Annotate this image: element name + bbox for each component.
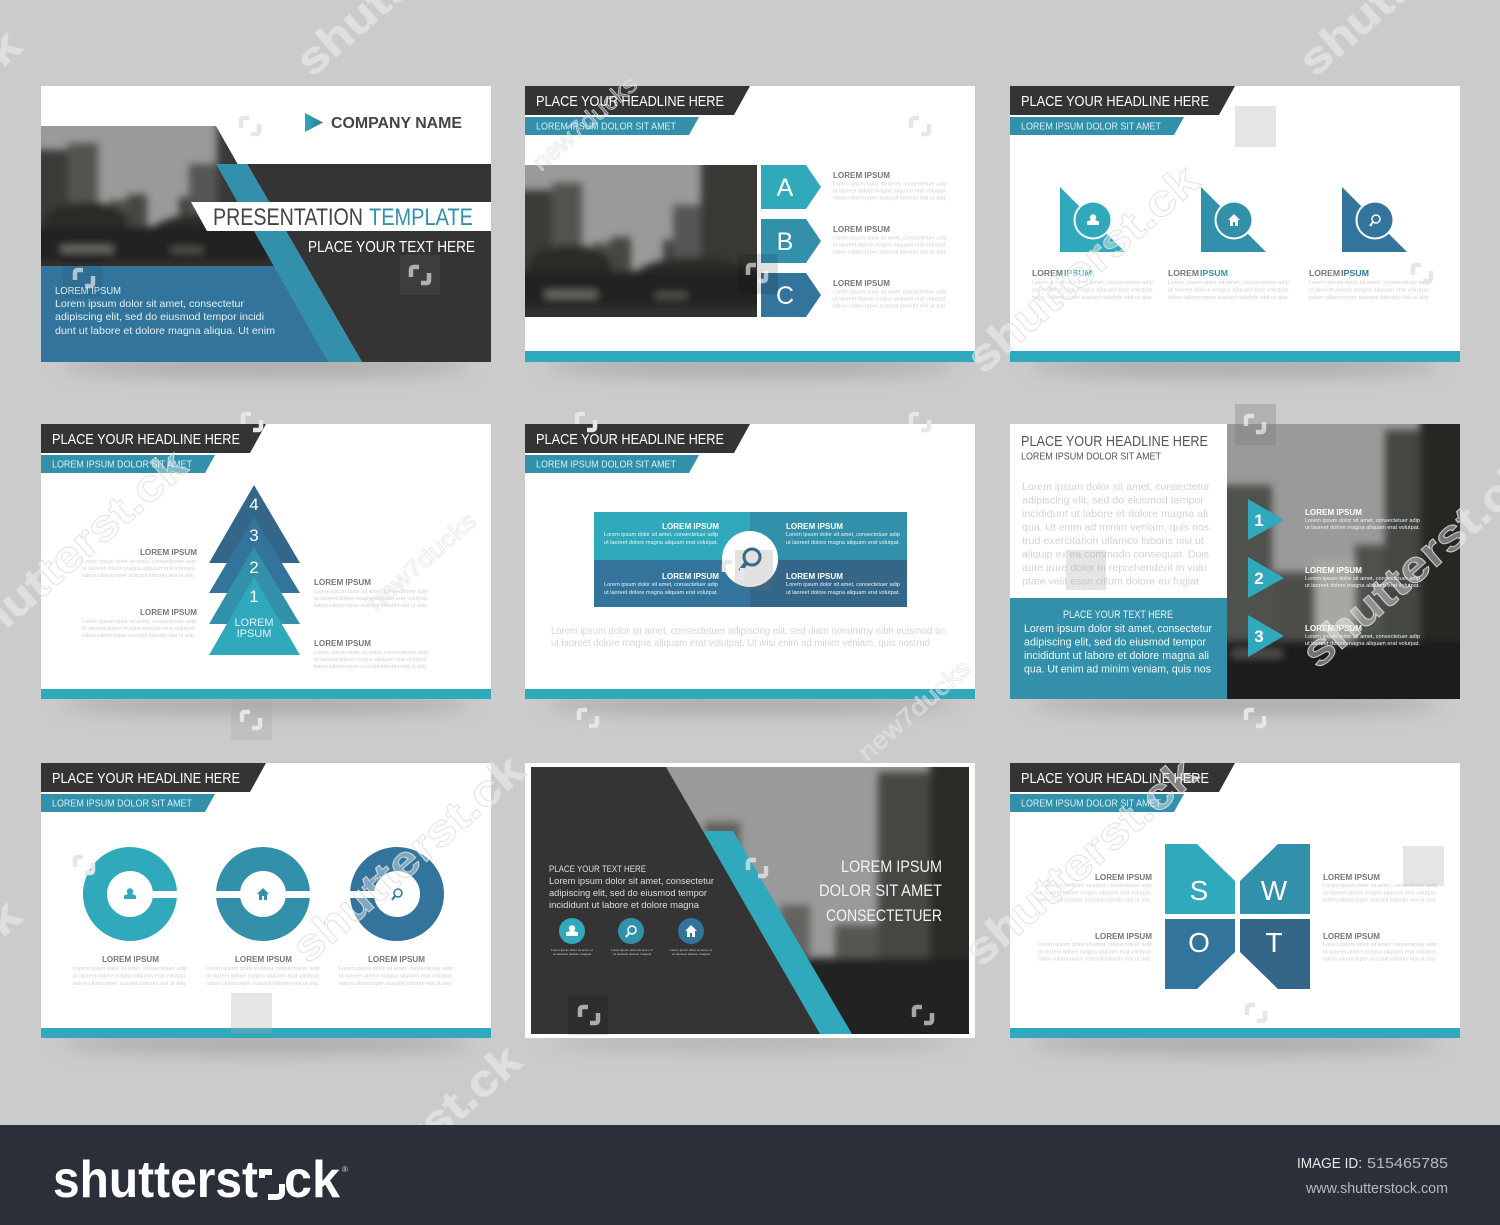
- text block S: [1038, 873, 1152, 904]
- image id: www.shutterstock.com: [1305, 1181, 1448, 1197]
- headline: LOREM IPSUM DOLOR SIT AMET: [52, 798, 192, 810]
- caption 1: [1305, 508, 1420, 531]
- panel: stacked triangles: [41, 424, 491, 699]
- text block upper right: [314, 578, 428, 609]
- text block 2: Lorem ipsum dolor sit amet, consectetuer adip: [206, 966, 320, 972]
- chart: triangle stack: LOREM: [234, 617, 274, 629]
- numbered arrow 3: [1248, 615, 1284, 657]
- text block T: ut laoreet dolore magna aliquam erat volutpat.: [1323, 950, 1437, 956]
- paragraph: [551, 626, 945, 649]
- watermark layer: shutterst.ck: [957, 155, 1209, 383]
- caption 3: LOREM IPSUM: [1305, 624, 1362, 633]
- text block 2: Lorem ipsum dolor sit amet, consectetuer adip: [1168, 280, 1289, 286]
- chart: triangle stack: [209, 485, 300, 655]
- text block B: LOREM IPSUM: [833, 225, 890, 234]
- quadrant box: Lorem ipsum dolor sit amet, consectetuer adip: [786, 582, 900, 588]
- blue text block: adipiscing elit, sed do eiusmod tempor: [1024, 636, 1206, 648]
- icon: user circle: [559, 918, 585, 944]
- panel: text with photo and numbered arrows: [1010, 415, 1475, 710]
- diagonal teal strip: [703, 831, 852, 1034]
- text block 1: Lorem ipsum dolor sit amet, consectetuer adip: [1032, 280, 1153, 286]
- quadrant box: ut laoreet dolore magna aliquam erat volutpat.: [786, 590, 900, 596]
- SWOT tile W: [1240, 844, 1310, 914]
- headline: PLACE YOUR HEADLINE HERE: [1021, 770, 1209, 787]
- headline: [1010, 86, 1235, 135]
- photo: blurred city: [41, 126, 274, 266]
- text block C: [833, 279, 947, 310]
- logo: shutterstock: ck: [284, 1151, 340, 1209]
- headline: LOREM IPSUM DOLOR SIT AMET: [1021, 120, 1161, 132]
- paragraph: ptate velit esse cillum dolore eu fugiat: [1022, 576, 1199, 588]
- closing title: LOREM IPSUM: [841, 857, 942, 876]
- text block C: LOREM IPSUM: [833, 279, 890, 288]
- icon: home circle: [678, 918, 704, 944]
- panel: three donuts: [41, 763, 491, 1038]
- text block 1: tation ullamcorper suscipit lobortis nisl ut aliq: [1032, 295, 1151, 301]
- blue text block: PLACE YOUR TEXT HERE: [1063, 609, 1173, 621]
- SWOT tile S: S: [1190, 875, 1208, 906]
- text block upper right: ut laoreet dolore magna aliquam erat volutpat.: [314, 596, 428, 602]
- text block C: Lorem ipsum dolor sit amet, consectetuer adip: [833, 290, 947, 296]
- arrow B: B: [777, 228, 793, 256]
- paragraph: Lorem ipsum dolor sit amet, consectetur: [1022, 481, 1211, 493]
- panel: four-quadrant box: [525, 424, 975, 699]
- headline: LOREM IPSUM DOLOR SIT AMET: [536, 458, 676, 470]
- SWOT tile T: T: [1265, 927, 1283, 958]
- quadrant box: ut laoreet dolore magna aliquam erat volutpat.: [604, 540, 718, 546]
- blue text block: LOREM IPSUM: [55, 286, 121, 297]
- paragraph: adipiscing elit, sed do eiusmod tempor: [1022, 494, 1205, 506]
- headline: PLACE YOUR HEADLINE HERE: [52, 770, 240, 787]
- arrow C: C: [776, 282, 794, 310]
- text block B: ut laoreet dolore magna aliquam erat volutpat.: [833, 242, 947, 248]
- caption 3: [1305, 624, 1420, 647]
- text block S: tation ullamcorper suscipit lobortis nisl ut aliq: [1038, 898, 1150, 904]
- image id: [1297, 1156, 1448, 1197]
- text block C: tation ullamcorper suscipit lobortis nisl ut aliq: [833, 304, 945, 310]
- panel: SWOT: [1010, 763, 1460, 1038]
- arrow C: [761, 273, 821, 317]
- chart: triangle stack: 3: [249, 526, 259, 545]
- text block upper right: LOREM IPSUM: [314, 578, 371, 587]
- caption 1: LOREM IPSUM: [1305, 508, 1362, 517]
- blue text block: qua. Ut enim ad minim veniam, quis nos: [1024, 664, 1211, 676]
- headline: LOREM IPSUM DOLOR SIT AMET: [536, 120, 676, 132]
- text block upper left: Lorem ipsum dolor sit amet, consectetuer adip: [82, 559, 196, 565]
- icon: search circle: [618, 918, 644, 944]
- icon captions: ut laoreet dolore magna: [613, 952, 651, 956]
- caption 2: [1305, 566, 1420, 589]
- caption 2: ut laoreet dolore magna aliquam erat volutpat.: [1305, 583, 1420, 589]
- text block S: LOREM IPSUM: [1095, 873, 1152, 882]
- text block W: tation ullamcorper suscipit lobortis nisl ut aliq: [1323, 898, 1435, 904]
- photo: blurred city: [525, 165, 757, 317]
- title band: PRESENTATION: [213, 204, 363, 231]
- text block lower right: Lorem ipsum dolor sit amet, consectetuer adip: [314, 650, 428, 656]
- quadrant box: LOREM IPSUM: [786, 572, 843, 581]
- headline: [525, 86, 750, 135]
- text block 2: tation ullamcorper suscipit lobortis nisl ut aliq: [1168, 295, 1287, 301]
- donut: search: [349, 859, 432, 929]
- numbered arrow 2: [1248, 557, 1284, 598]
- quadrant box: LOREM IPSUM: [786, 522, 843, 531]
- SWOT tile W: W: [1261, 875, 1288, 906]
- text block 3: ut laoreet dolore magna aliquam erat volutpat.: [1309, 288, 1430, 294]
- text block 2: [1168, 269, 1289, 301]
- quadrant box: Lorem ipsum dolor sit amet, consectetuer adip: [786, 532, 900, 538]
- text block 2: ut laoreet dolore magna aliquam erat volutpat.: [1168, 288, 1289, 294]
- icon: home triangle: [1201, 187, 1266, 252]
- text block W: ut laoreet dolore magna aliquam erat volutpat.: [1323, 890, 1437, 896]
- headline: PLACE YOUR HEADLINE HERE: [52, 431, 240, 448]
- chart: triangle stack: 2: [249, 558, 259, 577]
- watermark layer: new7ducks: [853, 654, 977, 767]
- text block O: tation ullamcorper suscipit lobortis nisl ut aliq: [1038, 956, 1150, 962]
- headline: [1021, 433, 1208, 462]
- text block lower right: [314, 639, 428, 670]
- text block 1: ut laoreet dolore magna aliquam erat volutpat.: [73, 974, 187, 980]
- text block upper left: [82, 548, 197, 579]
- text block: adipiscing elit, sed do eiusmod tempor: [549, 888, 707, 899]
- text block 3: IPSUM: [1341, 269, 1369, 278]
- closing title: CONSECTETUER: [826, 906, 942, 925]
- text block: incididunt ut labore et dolore magna: [549, 900, 700, 911]
- paragraph: Lorem ipsum dolor sit amet, consectetuer adipiscing elit, sed diam nonummy nibh euismod tin: [551, 626, 945, 637]
- panel: closing slide: [525, 760, 980, 1043]
- SWOT tile O: O: [1188, 927, 1210, 958]
- caption 2: Lorem ipsum dolor sit amet, consectetuer adip: [1305, 576, 1420, 582]
- quadrant box: Lorem ipsum dolor sit amet, consectetuer adip: [604, 532, 718, 538]
- image id: 515465785: [1367, 1156, 1448, 1172]
- text block 2: LOREM IPSUM: [235, 955, 292, 964]
- icon: search triangle: [1342, 187, 1407, 252]
- icon captions: [551, 948, 712, 956]
- panel: photo with A B C: [515, 86, 975, 362]
- text block B: [833, 225, 947, 256]
- text block upper left: ut laoreet dolore magna aliquam erat volutpat.: [82, 566, 196, 572]
- donut: home: [215, 859, 312, 929]
- quadrant box: LOREM IPSUM: [662, 572, 719, 581]
- headline: [525, 424, 750, 473]
- text block 2: ut laoreet dolore magna aliquam erat volutpat.: [206, 974, 320, 980]
- numbered arrow 2: 2: [1254, 569, 1264, 588]
- text block lower right: tation ullamcorper suscipit lobortis nisl ut aliq: [314, 664, 426, 670]
- image id: IMAGE ID:: [1297, 1156, 1362, 1172]
- text block 1: LOREM IPSUM: [102, 955, 159, 964]
- footer bar: [0, 1125, 1500, 1225]
- logo: shutterstock: ®: [342, 1165, 348, 1174]
- text block W: LOREM IPSUM: [1323, 873, 1380, 882]
- text block O: ut laoreet dolore magna aliquam erat volutpat.: [1038, 950, 1152, 956]
- text block 2: IPSUM: [1200, 269, 1228, 278]
- numbered arrow 1: 1: [1254, 511, 1264, 530]
- SWOT tile T: [1240, 919, 1310, 989]
- text block O: [1038, 932, 1152, 962]
- panel: cover slide: [31, 86, 491, 362]
- blue text block: adipiscing elit, sed do eiusmod tempor incidi: [55, 311, 264, 323]
- watermark layer: shutterst.ck: [955, 748, 1207, 976]
- paragraph: trud exercitation ullamco laboris nisi ut: [1022, 535, 1204, 547]
- text block upper left: LOREM IPSUM: [140, 548, 197, 557]
- headline: PLACE YOUR HEADLINE HERE: [1021, 93, 1209, 110]
- donut: user: [95, 859, 179, 929]
- headline: LOREM IPSUM DOLOR SIT AMET: [1021, 798, 1161, 810]
- text block 3: [339, 955, 453, 987]
- headline: LOREM IPSUM DOLOR SIT AMET: [1021, 450, 1161, 462]
- SWOT tile S: [1165, 844, 1235, 914]
- text block: [549, 864, 714, 911]
- text block 2: tation ullamcorper suscipit lobortis nisl ut aliq: [206, 981, 318, 987]
- quadrant box: [594, 512, 907, 607]
- icon captions: Lorem ipsum dolor sit amet, ut: [670, 948, 712, 952]
- text block 1: tation ullamcorper suscipit lobortis nisl ut aliq: [73, 981, 185, 987]
- text block S: Lorem ipsum dolor sit amet, consectetuer adip: [1038, 883, 1152, 889]
- blue text block: Lorem ipsum dolor sit amet, consectetur: [55, 298, 245, 310]
- paragraph: [1022, 481, 1211, 588]
- paragraph: qua. Ut enim ad minim veniam, quis nos: [1022, 522, 1209, 534]
- text block 1: [73, 955, 187, 987]
- text block B: Lorem ipsum dolor sit amet, consectetuer adip: [833, 236, 947, 242]
- text block A: LOREM IPSUM: [833, 171, 890, 180]
- text block: PLACE YOUR TEXT HERE: [549, 864, 646, 874]
- text block A: ut laoreet dolore magna aliquam erat volutpat.: [833, 188, 947, 194]
- chart: triangle stack: 4: [249, 495, 259, 514]
- text block C: ut laoreet dolore magna aliquam erat volutpat.: [833, 296, 947, 302]
- text block 1: [1032, 269, 1153, 301]
- text block lower left: Lorem ipsum dolor sit amet, consectetuer adip: [82, 619, 196, 625]
- text block 1: Lorem ipsum dolor sit amet, consectetuer adip: [73, 966, 187, 972]
- watermark layer: shutterst.ck: [282, 745, 534, 973]
- text block: Lorem ipsum dolor sit amet, consectetur: [549, 876, 714, 887]
- text block 3: Lorem ipsum dolor sit amet, consectetuer adip: [339, 966, 453, 972]
- text block T: LOREM IPSUM: [1323, 932, 1380, 941]
- numbered arrow 3: 3: [1254, 627, 1264, 646]
- arrow A: A: [777, 174, 794, 202]
- caption 3: ut laoreet dolore magna aliquam erat volutpat.: [1305, 641, 1420, 647]
- text block upper left: tation ullamcorper suscipit lobortis nisl ut aliq: [82, 573, 194, 579]
- text block O: Lorem ipsum dolor sit amet, consectetuer adip: [1038, 942, 1152, 948]
- icon captions: ut laoreet dolore magna: [553, 952, 591, 956]
- text block 1: IPSUM: [1064, 269, 1092, 278]
- headline: [1010, 763, 1235, 812]
- text block W: Lorem ipsum dolor sit amet, consectetuer adip: [1323, 883, 1437, 889]
- photo: blurred city: [1227, 424, 1460, 699]
- text block 3: ut laoreet dolore magna aliquam erat volutpat.: [339, 974, 453, 980]
- text block 1: ut laoreet dolore magna aliquam erat volutpat.: [1032, 288, 1153, 294]
- title band: [191, 202, 491, 231]
- text block A: tation ullamcorper suscipit lobortis nisl ut aliq: [833, 196, 945, 202]
- icon captions: ut laoreet dolore magna: [672, 952, 710, 956]
- closing title: [819, 857, 942, 925]
- arrow A: [761, 165, 821, 209]
- blue text block: dunt ut labore et dolore magna aliqua. Ut enim: [55, 325, 275, 337]
- arrow B: [761, 219, 821, 263]
- text block 3: LOREM: [1309, 269, 1340, 278]
- text block A: [833, 171, 947, 202]
- caption 1: ut laoreet dolore magna aliquam erat volutpat.: [1305, 525, 1420, 531]
- text block 1: LOREM: [1032, 269, 1063, 278]
- blue text block: incididunt ut labore et dolore magna ali: [1024, 650, 1209, 662]
- slide shadows: [61, 356, 1440, 1053]
- numbered arrow 1: [1248, 499, 1284, 540]
- title band: TEMPLATE: [369, 204, 473, 231]
- text block S: ut laoreet dolore magna aliquam erat volutpat.: [1038, 890, 1152, 896]
- headline: [41, 424, 266, 473]
- text block 3: tation ullamcorper suscipit lobortis nisl ut aliq: [1309, 295, 1428, 301]
- text block 2: LOREM: [1168, 269, 1199, 278]
- photo: blurred city: [666, 767, 969, 1034]
- logo: shutterstock: shutterst: [53, 1151, 258, 1209]
- quadrant box: Lorem ipsum dolor sit amet, consectetuer adip: [604, 582, 718, 588]
- caption 3: Lorem ipsum dolor sit amet, consectetuer adip: [1305, 634, 1420, 640]
- text block 2: [206, 955, 320, 987]
- logo: company name: COMPANY NAME: [331, 115, 462, 132]
- dark panel: [247, 164, 491, 362]
- headline: PLACE YOUR HEADLINE HERE: [536, 93, 724, 110]
- text block O: LOREM IPSUM: [1095, 932, 1152, 941]
- paragraph: ut laoreet dolore magna aliquam erat volutpat. Ut wisi enim ad minim veniam, quis nostrud: [551, 638, 930, 649]
- quadrant box: LOREM IPSUM: [662, 522, 719, 531]
- SWOT tile O: [1165, 919, 1235, 989]
- paragraph: aute irure dolor in reprehenderit in volu: [1022, 562, 1207, 574]
- icon: magnifier circle: [722, 531, 778, 587]
- subtitle: PLACE YOUR TEXT HERE: [308, 239, 475, 256]
- diagonal blue strip: [216, 164, 362, 362]
- blue text block: [1010, 598, 1227, 699]
- text block lower left: LOREM IPSUM: [140, 608, 197, 617]
- text block lower left: [82, 608, 197, 639]
- quadrant box: ut laoreet dolore magna aliquam erat volutpat.: [604, 590, 718, 596]
- text block lower right: ut laoreet dolore magna aliquam erat volutpat.: [314, 657, 428, 663]
- watermark layer: new7ducks: [527, 71, 643, 177]
- text block B: tation ullamcorper suscipit lobortis nisl ut aliq: [833, 250, 945, 256]
- text block T: Lorem ipsum dolor sit amet, consectetuer adip: [1323, 942, 1437, 948]
- watermark layer: new7ducks: [362, 508, 482, 617]
- text block lower left: tation ullamcorper suscipit lobortis nisl ut aliq: [82, 633, 194, 639]
- chart: triangle stack: 1: [249, 587, 259, 606]
- blue text block: Lorem ipsum dolor sit amet, consectetur: [1024, 623, 1212, 635]
- headline: PLACE YOUR HEADLINE HERE: [536, 431, 724, 448]
- text block 3: Lorem ipsum dolor sit amet, consectetuer adip: [1309, 280, 1430, 286]
- icon captions: Lorem ipsum dolor sit amet, ut: [611, 948, 653, 952]
- text block T: [1323, 932, 1437, 962]
- text block 3: [1309, 269, 1430, 301]
- text block A: Lorem ipsum dolor sit amet, consectetuer adip: [833, 182, 947, 188]
- text block lower left: ut laoreet dolore magna aliquam erat volutpat.: [82, 626, 196, 632]
- text block upper right: Lorem ipsum dolor sit amet, consectetuer adip: [314, 589, 428, 595]
- headline: PLACE YOUR HEADLINE HERE: [1021, 433, 1208, 450]
- caption 1: Lorem ipsum dolor sit amet, consectetuer adip: [1305, 518, 1420, 524]
- text block lower right: LOREM IPSUM: [314, 639, 371, 648]
- text block 3: LOREM IPSUM: [368, 955, 425, 964]
- text block upper right: tation ullamcorper suscipit lobortis nisl ut aliq: [314, 603, 426, 609]
- paragraph: aliquip ex ea commodo consequat. Duis: [1022, 548, 1209, 560]
- headline: LOREM IPSUM DOLOR SIT AMET: [52, 458, 192, 470]
- chart: triangle stack: IPSUM: [237, 628, 271, 640]
- panel: three triangles: [1010, 86, 1460, 362]
- text block T: tation ullamcorper suscipit lobortis nisl ut aliq: [1323, 956, 1435, 962]
- caption 2: LOREM IPSUM: [1305, 566, 1362, 575]
- icon: user triangle: [1060, 187, 1125, 252]
- quadrant box: ut laoreet dolore magna aliquam erat volutpat.: [786, 540, 900, 546]
- text block W: [1323, 873, 1437, 904]
- text block 3: tation ullamcorper suscipit lobortis nisl ut aliq: [339, 981, 451, 987]
- blue text block: [41, 266, 330, 362]
- dark diagonal panel: [531, 767, 820, 1034]
- icon captions: Lorem ipsum dolor sit amet, ut: [551, 948, 593, 952]
- headline: [41, 763, 266, 812]
- paragraph: incididunt ut labore et dolore magna ali: [1022, 508, 1208, 520]
- closing title: DOLOR SIT AMET: [819, 881, 942, 900]
